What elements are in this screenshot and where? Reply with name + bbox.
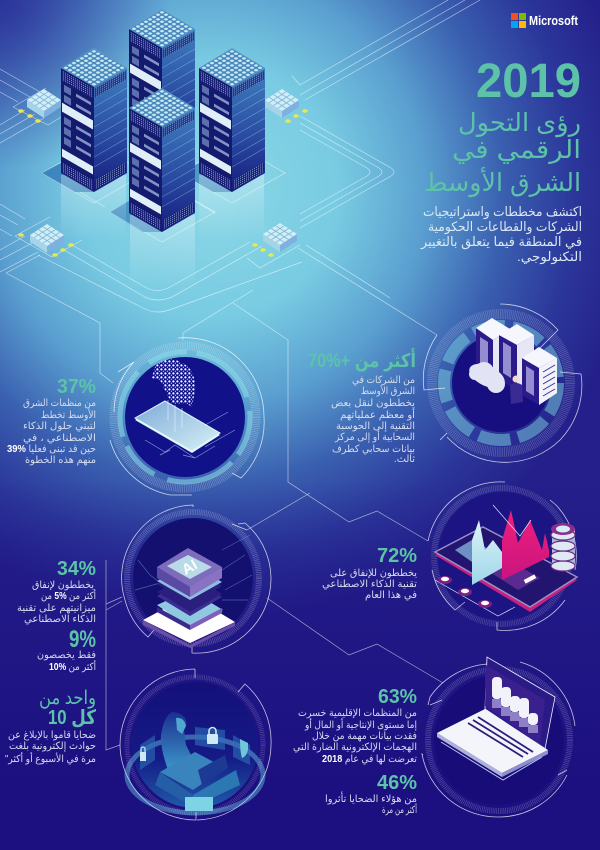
stat: 9%: 9% xyxy=(69,626,96,653)
server: right xyxy=(522,347,557,405)
body text: من الشركات في xyxy=(352,375,415,386)
phone xyxy=(135,403,220,453)
icon: small padlock xyxy=(140,747,146,761)
circle: phone and AI head xyxy=(110,338,264,495)
body text: الأوسط تخطط xyxy=(41,408,96,421)
intro text xyxy=(420,204,582,265)
circuit lines xyxy=(0,0,480,750)
body text: 63%: تعرضت لها في عام 2018 xyxy=(322,754,417,765)
area chart xyxy=(472,520,502,585)
body text: في هذا العام xyxy=(365,590,417,601)
body text: 63%: من المنظمات الإقليمية خسرت xyxy=(298,708,417,719)
year: 2019 xyxy=(476,55,581,108)
icon: shield xyxy=(240,739,248,758)
chips with yellow nodes xyxy=(18,89,308,257)
laptop base xyxy=(437,709,548,773)
stat: 46%: 46% xyxy=(377,772,417,794)
body text: 34% xyxy=(17,580,96,625)
stat: 34%: 34% xyxy=(57,558,96,580)
AI label: AI xyxy=(179,556,200,579)
tablet xyxy=(435,527,577,612)
body text: 63%: فقدت بيانات مهمة من خلال xyxy=(312,731,417,742)
body text xyxy=(5,730,96,765)
intro text: اكتشف مخططات واستراتيجيات xyxy=(423,204,582,220)
panel: 37% AI adoption xyxy=(7,338,264,495)
body text: 9%: فقط يخصصون xyxy=(37,650,96,661)
body text: يخططون لنقل بعض xyxy=(331,398,415,409)
AI head xyxy=(152,359,195,407)
body text: يخططون للإنفاق على xyxy=(330,568,417,579)
laptop screen xyxy=(485,657,555,749)
title: الشرق الأوسط xyxy=(424,166,581,198)
title: الرقمي في xyxy=(452,136,581,164)
body text: الشرق الأوسط xyxy=(361,384,415,397)
panel: 63% and 46% breaches xyxy=(293,657,575,817)
stat: 63%: 63% xyxy=(378,686,417,708)
body text: 34%: الذكاء الاصطناعي xyxy=(24,614,96,625)
database cylinder xyxy=(551,523,575,571)
body text: 34%: يخططون لإنفاق xyxy=(32,580,94,591)
logo: Microsoft: Microsoft xyxy=(529,14,579,28)
circle: data chart xyxy=(428,482,577,630)
body text: ثالث. xyxy=(394,454,415,465)
body text: 46%: أكثر من مرة xyxy=(382,803,417,816)
body text: حوادث إلكترونية بلغت xyxy=(9,741,96,752)
keyboard lines xyxy=(468,717,533,757)
hacker figure xyxy=(161,712,196,775)
body text: من منظمات الشرق xyxy=(23,398,96,409)
body text: 63%: الهجمات الإلكترونية الضارة التي xyxy=(293,742,417,753)
person xyxy=(510,376,523,404)
intro text: في المنطقة فيما يتعلق بالتغيير xyxy=(420,234,582,250)
title: رؤى التحول xyxy=(458,109,581,138)
body text: 34%: أكثر من ‪5%‬ من xyxy=(41,589,96,602)
circle: hacker dome xyxy=(120,669,271,820)
glowing nodes xyxy=(435,576,515,616)
icon: padlock xyxy=(207,728,218,744)
base plate xyxy=(143,595,235,643)
intro text: الشركات والقطاعات الحكومية xyxy=(428,219,582,235)
cloud xyxy=(466,359,508,393)
body text: الاصطناعي ، في xyxy=(23,433,96,444)
stat: واحد من xyxy=(39,688,96,709)
heading xyxy=(420,55,582,265)
body text: التقنية إلى الحوسبة xyxy=(336,421,415,432)
body text: تقنية الذكاء الاصطناعي xyxy=(322,579,417,590)
title xyxy=(424,109,581,198)
rack right xyxy=(199,48,265,192)
body text: مرة في الأسبوع أو أكثر" xyxy=(5,752,96,765)
body text: 63%: إما مستوى الإنتاجية أو المال أو xyxy=(304,718,417,731)
panel: 34% and 9% budgets xyxy=(17,505,271,673)
circle: cloud servers xyxy=(423,304,582,462)
intro text: التكنولوجي. xyxy=(517,249,582,265)
body text: 46%: من هؤلاء الضحايا تأثروا xyxy=(325,791,417,805)
panel: 70% cloud xyxy=(308,304,582,465)
stat: 72% xyxy=(377,545,417,567)
stat: كل 10 xyxy=(48,707,96,729)
illustration: server racks xyxy=(42,9,285,290)
desk xyxy=(155,752,240,811)
panel: one in ten xyxy=(5,669,271,820)
circle: laptop xyxy=(422,657,575,817)
stack layers xyxy=(157,548,223,630)
body text: منهم هذه الخطوة xyxy=(25,455,96,466)
stat: أكثر من ‪70%+‬ xyxy=(308,348,416,372)
server: middle xyxy=(499,324,534,390)
rack left xyxy=(61,48,127,192)
body text: بيانات سحابي كطرف xyxy=(332,444,415,455)
body text: أو معظم عملياتهم xyxy=(340,408,415,421)
stat xyxy=(39,688,96,729)
rack back xyxy=(129,9,195,153)
body text: 34%: ميزانيتهم على تقنية xyxy=(17,603,96,614)
rack platforms and reflections xyxy=(42,143,285,290)
rack front xyxy=(129,88,195,232)
body text xyxy=(322,568,417,601)
circle: AI chip stack xyxy=(122,505,271,653)
panel: 72% AI spending xyxy=(322,482,577,630)
body text: 63% xyxy=(293,708,417,765)
body text: لتبني حلول الذكاء xyxy=(23,421,96,432)
body text: 9%: أكثر من ‪10%‬ xyxy=(49,660,96,673)
stat: 37% xyxy=(57,376,96,398)
body text: ضحايا قاموا بالإبلاغ عن xyxy=(8,730,96,741)
body text: السحابية أو إلى مركز xyxy=(334,430,415,443)
body text: 46% xyxy=(325,791,417,816)
body text xyxy=(331,375,415,465)
body text xyxy=(7,398,96,466)
server: left xyxy=(476,318,510,385)
body text: حين قد تبنى فعليا ‪39%‬ xyxy=(7,444,96,455)
logo: Microsoft xyxy=(511,13,579,28)
bar chart xyxy=(492,699,538,733)
body text: 9% xyxy=(37,650,96,673)
screens xyxy=(140,727,250,770)
